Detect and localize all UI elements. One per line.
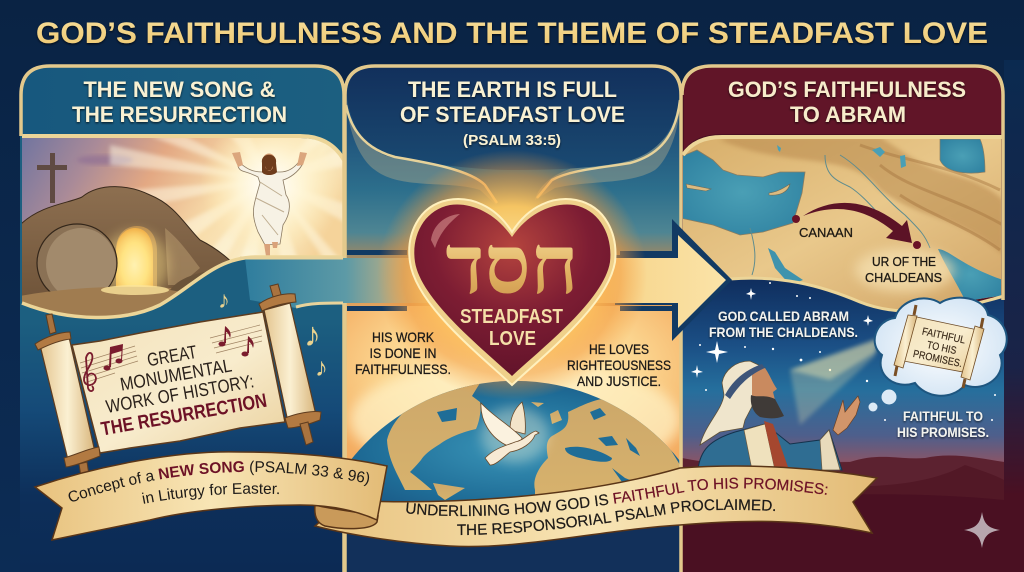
cloud wisp (77, 155, 133, 165)
panel 3 map (680, 135, 1005, 315)
route arrow (803, 203, 912, 243)
headband (725, 364, 765, 399)
small scroll text: TO HIS (926, 339, 958, 357)
panel 3 maroon body (682, 65, 1004, 572)
ground (22, 286, 178, 316)
head and beard (262, 154, 276, 170)
Red sea (768, 248, 803, 285)
ribbon curl (315, 505, 378, 529)
glow behind labels (855, 248, 955, 292)
map points (792, 215, 800, 223)
mountains (720, 137, 1003, 255)
figure: Abram (698, 361, 860, 470)
stars (691, 282, 996, 421)
scroll: great monumental work of history (35, 284, 321, 483)
text: he loves righteousness and justice: AND JUSTICE. (577, 373, 661, 389)
text: his work is done in faithfulness: IS DONE IN (370, 345, 436, 361)
ribbon text: Concept of a NEW SONG (PSALM 33 & 96) (68, 460, 370, 502)
icons: gold music notes: ♪ (315, 352, 328, 382)
Cyprus (769, 184, 790, 195)
tomb door (116, 226, 157, 290)
thought bubbles (882, 390, 896, 404)
heart fill (414, 204, 610, 376)
small scroll text: PROMISES. (912, 348, 963, 370)
panel 3 night sky scene (682, 276, 1004, 486)
small scroll in cloud (894, 305, 984, 388)
globe (347, 365, 680, 501)
map labels: CANAAN (799, 225, 853, 240)
caption: faithful to his promises: HIS PROMISES. (897, 424, 989, 440)
panel: the new song and the resurrection (20, 65, 350, 572)
Mediterranean sea (680, 150, 805, 235)
small scroll text (912, 326, 967, 370)
background right edge (1004, 60, 1024, 572)
feet (264, 242, 278, 256)
panel 1 heading: THE RESURRECTION (72, 102, 287, 127)
text: he loves righteousness and justice (567, 341, 671, 389)
banner: concept of a new song: in Liturgy for Easter. (142, 483, 279, 504)
panel 1 border (21, 66, 344, 572)
caption: God called Abram (709, 308, 858, 340)
panel 3 header (684, 68, 1001, 150)
headcloth (700, 361, 765, 445)
scroll text: WORK OF HISTORY: (104, 370, 256, 417)
rolled stone (37, 224, 117, 302)
text: his work is done in faithfulness (355, 329, 451, 377)
desert hills (682, 456, 1004, 486)
hands (232, 152, 307, 167)
icons: gold music notes: ♪ (218, 287, 230, 314)
scroll text: GREAT (145, 341, 198, 370)
banner: underlining how God is faithful (314, 465, 878, 548)
Persian gulf (938, 249, 1003, 300)
caption: God called Abram: GOD CALLED ABRAM (718, 308, 849, 324)
left roller (35, 314, 100, 483)
text: his work is done in faithfulness: FAITHFULNESS. (355, 361, 451, 377)
text: he loves righteousness and justice: RIGHTEOUSNESS (567, 357, 671, 373)
icons: gold music notes (218, 287, 328, 382)
map labels (799, 225, 942, 285)
rivers (750, 155, 930, 275)
lakes (777, 145, 906, 168)
icon: sparkle (964, 512, 1000, 548)
Caspian sea (940, 139, 985, 173)
panel 1 scene: resurrection and tomb (22, 138, 342, 316)
panel 1 body (20, 65, 345, 572)
small scroll text: FAITHFUL (921, 326, 967, 347)
panel 3 border (682, 66, 1003, 300)
panel 3 heading (728, 77, 966, 127)
lower navy (345, 510, 682, 572)
header wave gold lines (346, 105, 497, 203)
continents (387, 383, 690, 500)
parchment (72, 312, 285, 453)
flowing ribbons (347, 100, 496, 205)
Hebrew word: חסד (446, 220, 578, 311)
tunic (744, 424, 775, 470)
map gold edge (683, 137, 1002, 155)
heart label: LOVE (489, 328, 536, 350)
scroll text: THE RESURRECTION (99, 390, 269, 441)
sash (764, 421, 789, 470)
heading: (PSALM 33:5) (463, 133, 561, 149)
title: GOD’S FAITHFULNESS AND THE THEME OF STEADFAST LOVE (36, 17, 988, 50)
right roller (259, 284, 321, 445)
lower warm glow (347, 306, 680, 486)
text: his work is done in faithfulness: HIS WORK (372, 329, 435, 345)
heart label: STEADFAST (460, 306, 563, 328)
beam of light (790, 338, 877, 425)
Crete (686, 184, 711, 191)
sleeve cuff (820, 430, 840, 470)
panel 1 heading: THE NEW SONG & (84, 77, 276, 102)
banner: underlining how God is faithful: THE RESPONSORIAL PSALM PROCLAIMED. (457, 499, 775, 536)
music staff and notes on scroll (80, 325, 262, 383)
panel 2 borders (345, 66, 681, 572)
caption: faithful to his promises: FAITHFUL TO (903, 408, 983, 424)
thought cloud (875, 298, 1007, 396)
arrow: flows from the resurrection through the heart to Abram (240, 219, 732, 341)
face (752, 368, 777, 400)
ribbon body (35, 452, 387, 540)
heading (400, 77, 625, 149)
heart glow (377, 150, 647, 400)
banner text: UNDERLINING HOW GOD IS FAITHFUL TO HIS PROMISES: (406, 478, 828, 516)
panel 3 heading: GOD’S FAITHFULNESS (728, 77, 966, 102)
header wave (347, 68, 680, 170)
treble clef (84, 353, 96, 391)
banner: concept of a new song (34, 451, 388, 541)
heart label (460, 306, 563, 350)
scroll text: MONUMENTAL (118, 354, 233, 395)
heart rim (409, 199, 615, 385)
panel 1 heading (72, 77, 287, 127)
panel: God's faithfulness to Abram (680, 65, 1007, 572)
panel 1 header (22, 68, 342, 150)
panel: the earth is full of steadfast love (344, 64, 683, 572)
map labels: CHALDEANS (865, 270, 942, 285)
dove (481, 402, 549, 465)
heart highlight (431, 214, 460, 248)
icons: gold music notes: ♪ (304, 316, 321, 354)
hand (833, 396, 860, 435)
panel 2 background (345, 65, 682, 530)
beard (751, 395, 784, 418)
caption: God called Abram: FROM THE CHALDEANS. (709, 324, 858, 340)
light rays (108, 138, 342, 256)
robe (698, 424, 842, 470)
map labels: UR OF THE (872, 254, 936, 269)
beamed notes (104, 326, 254, 370)
scroll text (99, 341, 269, 441)
heading: THE EARTH IS FULL (408, 77, 617, 102)
icon: cross (37, 153, 67, 203)
gold image edge (22, 257, 343, 318)
heading: OF STEADFAST LOVE (400, 102, 625, 127)
panel 3 heading: TO ABRAM (790, 102, 906, 127)
heart with Hebrew word hesed (377, 150, 647, 400)
icon: rock tomb (22, 186, 230, 296)
caption: faithful to his promises (897, 408, 989, 440)
figure: risen Jesus (232, 152, 307, 256)
text: he loves righteousness and justice: HE LOVES (589, 341, 649, 357)
